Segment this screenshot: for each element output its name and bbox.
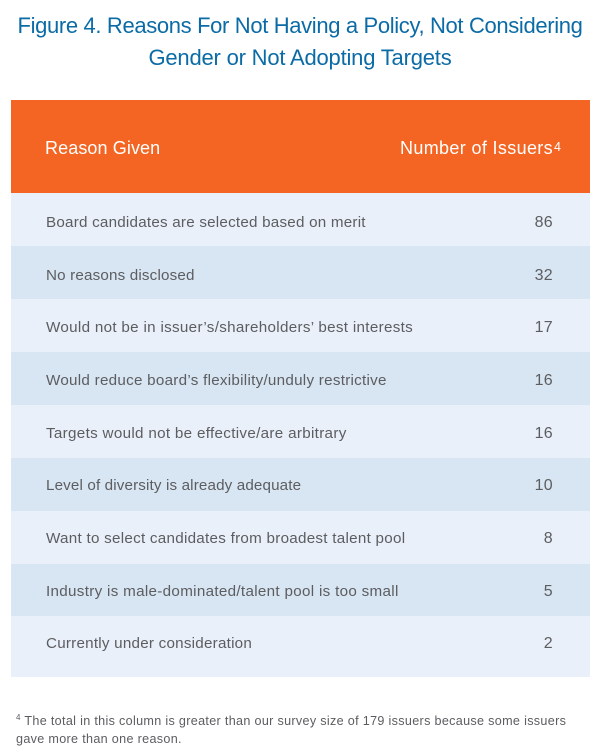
header: number of issuers: Number of Issuers4 [400,138,561,158]
table row 3 [11,299,590,352]
table row 4: 16 [535,372,553,389]
table row 6: 10 [535,477,553,494]
table row 9: 2 [544,635,553,652]
footnote: 4 The total in this column is greater than our survey size of 179 issuers because some issuers [16,713,566,728]
table row 1: Board candidates are selected based on merit [46,214,366,231]
title: Gender or Not Adopting Targets [148,44,452,70]
table row 9: Currently under consideration [46,635,252,652]
table row 4 [11,352,590,405]
table row 5: Targets would not be effective/are arbitrary [46,425,347,442]
footnote: gave more than one reason. [16,732,182,746]
table row 8: 5 [544,583,553,600]
table row 5: 16 [535,425,553,442]
table row 3: Would not be in issuer’s/shareholders’ best interests [46,319,413,336]
table header [11,100,590,193]
title [18,13,582,70]
table row 7: 8 [544,530,553,547]
table row 2: 32 [535,267,553,284]
table row 1 [11,193,590,246]
table row 8 [11,564,590,616]
table row 4: Would reduce board’s flexibility/unduly restrictive [46,372,387,389]
table row 3: 17 [535,319,553,336]
table row 9 [11,616,590,677]
table row 1: 86 [535,214,553,231]
table row 6 [11,458,590,511]
title: Figure 4. Reasons For Not Having a Policy, Not Considering [18,13,582,38]
table row 7: Want to select candidates from broadest talent pool [46,530,405,547]
table row 5 [11,405,590,458]
table row 6: Level of diversity is already adequate [46,477,301,494]
table row 2 [11,246,590,299]
table row 8: Industry is male-dominated/talent pool is too small [46,583,399,600]
footnote [16,713,566,746]
table row 2: No reasons disclosed [46,267,195,284]
header: reason given: Reason Given [45,138,160,158]
table row 7 [11,511,590,564]
